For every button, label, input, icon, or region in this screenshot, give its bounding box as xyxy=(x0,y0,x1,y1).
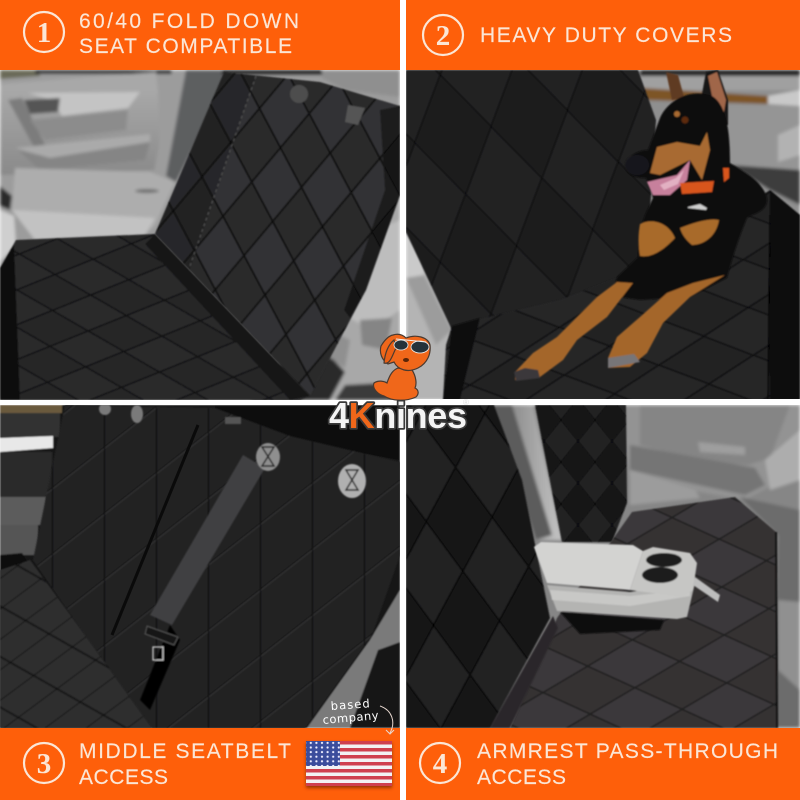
handwritten note: based company xyxy=(322,696,394,734)
panel 3: middle seatbelt access xyxy=(0,403,400,800)
panel 1: 60/40 fold down xyxy=(0,0,400,400)
header bar 1 xyxy=(0,0,400,70)
header bar 4 xyxy=(406,728,800,800)
armrest console xyxy=(534,542,720,634)
heading 4: ARMREST PASS-THROUGH xyxy=(477,740,778,763)
photo: dog on cover xyxy=(406,70,800,400)
mascot: orange dog with sunglasses xyxy=(374,334,430,400)
seat base cover, quilted xyxy=(0,234,310,400)
heading 3: MIDDLE SEATBELT xyxy=(79,740,291,763)
header bar 2 xyxy=(406,0,800,70)
number badge 1 xyxy=(24,12,64,52)
seat back cover, quilted xyxy=(155,72,400,396)
number badge 4 xyxy=(420,743,460,783)
anchor tabs xyxy=(99,403,366,498)
number badge 3: 3 xyxy=(37,748,51,780)
mascot nose xyxy=(403,358,409,362)
heading 2: HEAVY DUTY COVERS xyxy=(480,24,732,47)
heading 1: SEAT COMPATIBLE xyxy=(79,35,292,58)
near back cover, quilted xyxy=(406,405,558,728)
seat base cover, quilted xyxy=(0,560,152,728)
heading 3: ACCESS xyxy=(79,766,168,789)
doberman dog xyxy=(514,70,767,381)
photo: folded seat xyxy=(0,70,400,400)
4Knines logo xyxy=(329,334,469,436)
seatbelt strap xyxy=(140,455,265,710)
handwritten note: based company: based xyxy=(330,696,370,713)
number badge 3 xyxy=(24,743,64,783)
panel 4: armrest pass-through xyxy=(406,405,800,800)
panel 2: heavy duty covers xyxy=(406,0,800,400)
back cover, quilted xyxy=(33,405,400,728)
photo: armrest xyxy=(406,405,800,728)
number badge 2: 2 xyxy=(436,20,450,52)
seat base cover, quilted xyxy=(510,497,777,728)
heading 4: ACCESS xyxy=(477,766,566,789)
header bar 3 xyxy=(0,728,400,800)
heading 1: 60/40 FOLD DOWN xyxy=(79,10,299,33)
handwritten note: based company: company xyxy=(322,708,379,727)
registered mark: ® xyxy=(463,398,469,407)
US flag xyxy=(306,741,392,786)
center zipper seam xyxy=(112,425,198,635)
far back cover xyxy=(535,405,627,542)
seat base cover, quilted xyxy=(443,190,800,400)
number badge 2 xyxy=(423,15,463,55)
back cover, quilted xyxy=(406,70,656,345)
wordmark: 4Knines xyxy=(329,395,467,436)
photo: seatbelt xyxy=(0,403,400,728)
mascot sunglasses xyxy=(394,339,429,353)
number badge 4: 4 xyxy=(433,748,447,780)
number badge 1: 1 xyxy=(37,17,51,49)
